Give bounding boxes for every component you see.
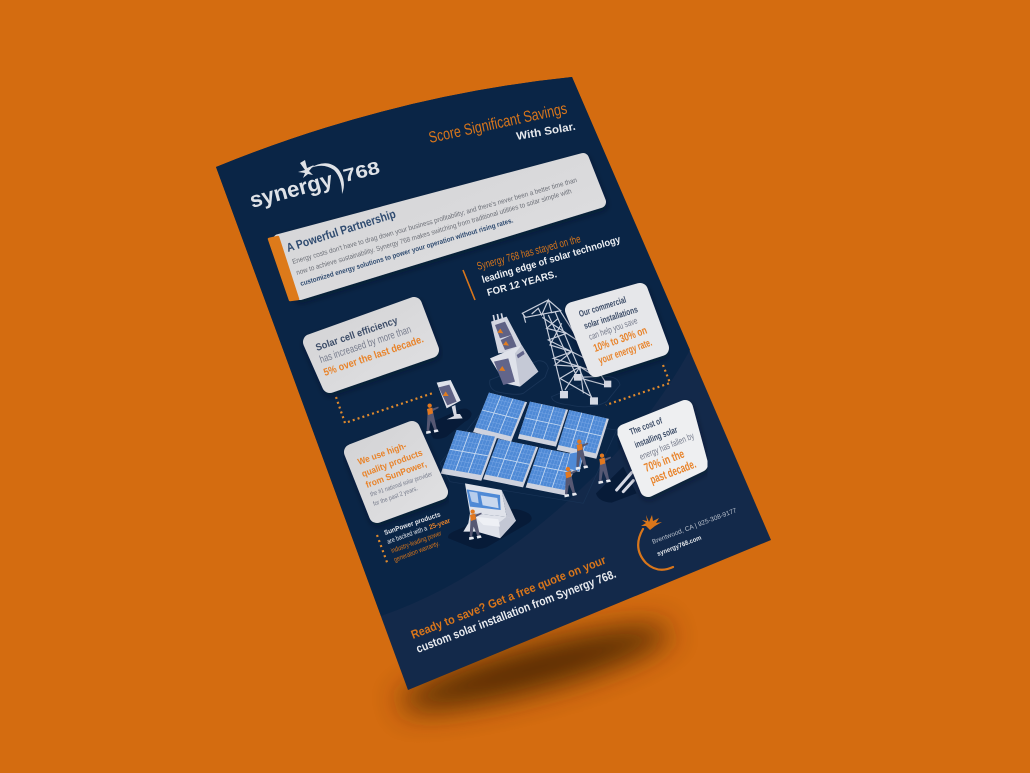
contact block bbox=[638, 507, 738, 570]
callout: sunpower: quality products bbox=[360, 448, 424, 479]
callout: solar cell efficiency: Solar cell efficiency bbox=[314, 315, 400, 354]
heading bbox=[427, 100, 577, 147]
callout: cost of solar bbox=[625, 408, 700, 489]
callout: sunpower: from SunPower, bbox=[364, 459, 428, 490]
callout: cost of solar: The cost of bbox=[628, 415, 664, 437]
text block: warranty: industry-leading power bbox=[390, 530, 443, 555]
callout: commercial installations bbox=[573, 291, 661, 369]
icon: small equipment bbox=[617, 473, 633, 492]
callout: cost of solar: past decade. bbox=[648, 457, 698, 487]
callout: solar cell efficiency: has increased by more than bbox=[318, 324, 413, 366]
heading: With Solar. bbox=[515, 121, 577, 143]
callout: commercial installations: your energy rate. bbox=[597, 337, 654, 367]
panel: a powerful partnership: A Powerful Partnership bbox=[285, 207, 397, 255]
drop shadow under flyer bbox=[394, 611, 676, 725]
text block: warranty bbox=[377, 511, 452, 565]
heading: Score Significant Savings bbox=[427, 100, 569, 147]
icon: control console bbox=[463, 483, 516, 538]
text block: warranty: generation warranty. bbox=[393, 540, 441, 564]
callout: sunpower: the #1 national solar provider bbox=[369, 471, 434, 498]
callout: commercial installations: 10% to 30% on bbox=[592, 325, 649, 355]
icon: small angled panel bbox=[566, 451, 584, 472]
callout: commercial installations: Our commercial bbox=[578, 294, 627, 319]
call to action: custom solar installation from Synergy 768. bbox=[414, 567, 618, 656]
callout: sunpower bbox=[352, 429, 440, 515]
icon: transmission tower bbox=[522, 300, 611, 405]
icon: transformer bbox=[490, 313, 538, 387]
panel: a powerful partnership: now to achieve sustainability. Synergy 768 makes switching from traditional utilities to solar simple with bbox=[296, 188, 573, 277]
text block: warranty: are backed with a bbox=[386, 525, 428, 546]
callout: solar cell efficiency: 5% over the last decade. bbox=[322, 333, 425, 379]
callout: leading edge bbox=[463, 233, 622, 300]
dotted connectors bbox=[336, 365, 670, 423]
panel: a powerful partnership: customized energy solutions to power your operation without rising rates. bbox=[300, 217, 514, 288]
callout: sunpower: for the past 2 years. bbox=[372, 485, 419, 508]
callout: commercial installations: can help you save bbox=[587, 315, 639, 342]
callout: solar cell efficiency bbox=[311, 305, 431, 385]
logo: 768 bbox=[341, 158, 382, 186]
flyer page bbox=[216, 77, 771, 690]
icon: workers bbox=[426, 403, 611, 540]
platform shadows bbox=[428, 409, 637, 549]
contact block: synergy768.com bbox=[656, 534, 703, 558]
callout: leading edge: Synergy 768 has stayed on the bbox=[476, 233, 582, 273]
logo: synergy bbox=[247, 166, 336, 213]
callout: leading edge: leading edge of solar technology bbox=[481, 234, 622, 286]
illustration: solar installation bbox=[426, 300, 637, 549]
callout: cost of solar: energy has fallen by bbox=[638, 431, 696, 462]
panel: a powerful partnership bbox=[269, 159, 600, 300]
callout: cost of solar: installing solar bbox=[633, 424, 679, 450]
text block: warranty: 25-year bbox=[428, 517, 452, 531]
transformer platform bbox=[490, 361, 548, 394]
callout: sunpower: We use high- bbox=[356, 440, 408, 467]
text block: warranty: SunPower products bbox=[383, 511, 442, 537]
callout: cost of solar: 70% in the bbox=[642, 447, 686, 475]
callout: leading edge: FOR 12 YEARS. bbox=[486, 269, 558, 299]
logo bbox=[247, 158, 382, 213]
callout: commercial installations: solar installations bbox=[583, 304, 639, 331]
icon: warning sign box bbox=[437, 380, 463, 419]
icon: solar panels bbox=[441, 393, 609, 495]
panel: a powerful partnership: Energy costs don't have to drag down your business profitability; and there's never been a better time than bbox=[292, 177, 578, 266]
call to action: Ready to save? Get a free quote on your bbox=[409, 553, 608, 642]
contact block: Brentwood, CA | 925-308-9177 bbox=[651, 507, 738, 546]
